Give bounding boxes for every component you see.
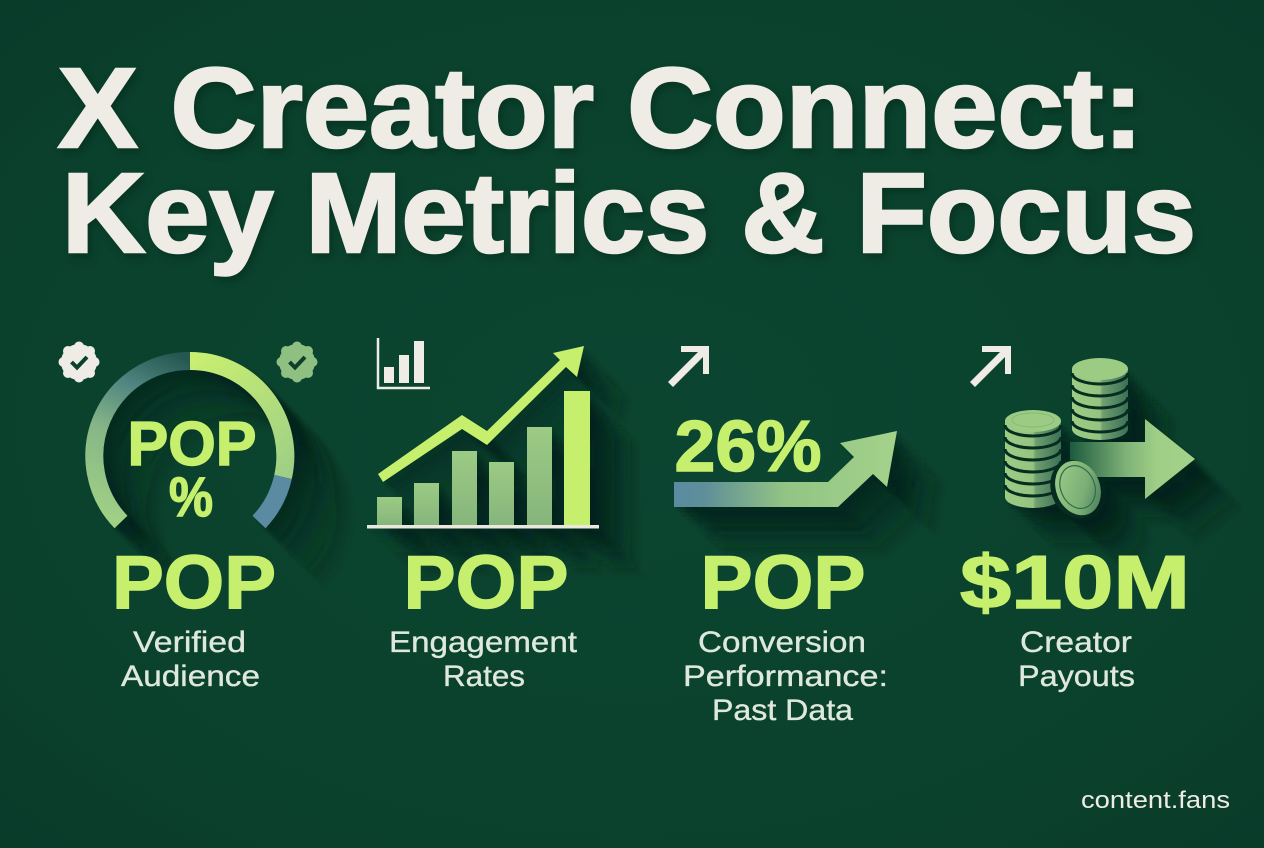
- icon: fallen coin: [1042, 452, 1110, 526]
- gauge ring: [94, 361, 285, 522]
- icon: small bar chart: [378, 338, 430, 388]
- icon: white verified badge: [58, 342, 100, 382]
- icon: front coin stack: [1005, 410, 1061, 508]
- title: [58, 45, 1196, 276]
- metric: $10M: $10M: [960, 540, 1190, 624]
- icon: small arrow: [970, 346, 1011, 387]
- growth arrow: [674, 431, 897, 507]
- value: 26%: 26%: [674, 407, 822, 487]
- label: creator payouts: Payouts: [1018, 660, 1135, 693]
- trend arrow: [378, 346, 584, 482]
- panel: verified audience: [58, 342, 346, 693]
- payout arrow: [1070, 419, 1195, 499]
- metric: POP: POP: [404, 540, 568, 624]
- icon: small arrow: [668, 346, 709, 387]
- label: verified audience: Verified: [133, 626, 246, 659]
- icon: green verified badge: [276, 342, 318, 382]
- label: conversion performance: Performance:: [683, 660, 888, 693]
- label: engagement rates: Rates: [443, 660, 525, 693]
- gauge value: [128, 410, 256, 528]
- panel: conversion performance: [668, 346, 947, 727]
- label: conversion performance: Past Data: [712, 694, 853, 727]
- gauge value: POP: [128, 410, 256, 479]
- panel: engagement rates: [367, 338, 649, 693]
- label: engagement rates: Engagement: [389, 626, 578, 659]
- icon: back coin stack: [1072, 358, 1128, 440]
- bar chart: [367, 391, 599, 528]
- panel: creator payouts: [960, 346, 1245, 693]
- footer credit: content.fans: [1081, 787, 1230, 814]
- metric: POP: POP: [700, 540, 866, 624]
- label: verified audience: Audience: [121, 660, 260, 693]
- label: creator payouts: Creator: [1020, 626, 1132, 659]
- label: conversion performance: Conversion: [698, 626, 866, 659]
- title: Key Metrics & Focus: [62, 150, 1196, 276]
- title: X Creator Connect:: [58, 45, 1143, 171]
- metric: POP: POP: [112, 540, 276, 624]
- gauge value: %: [169, 465, 213, 528]
